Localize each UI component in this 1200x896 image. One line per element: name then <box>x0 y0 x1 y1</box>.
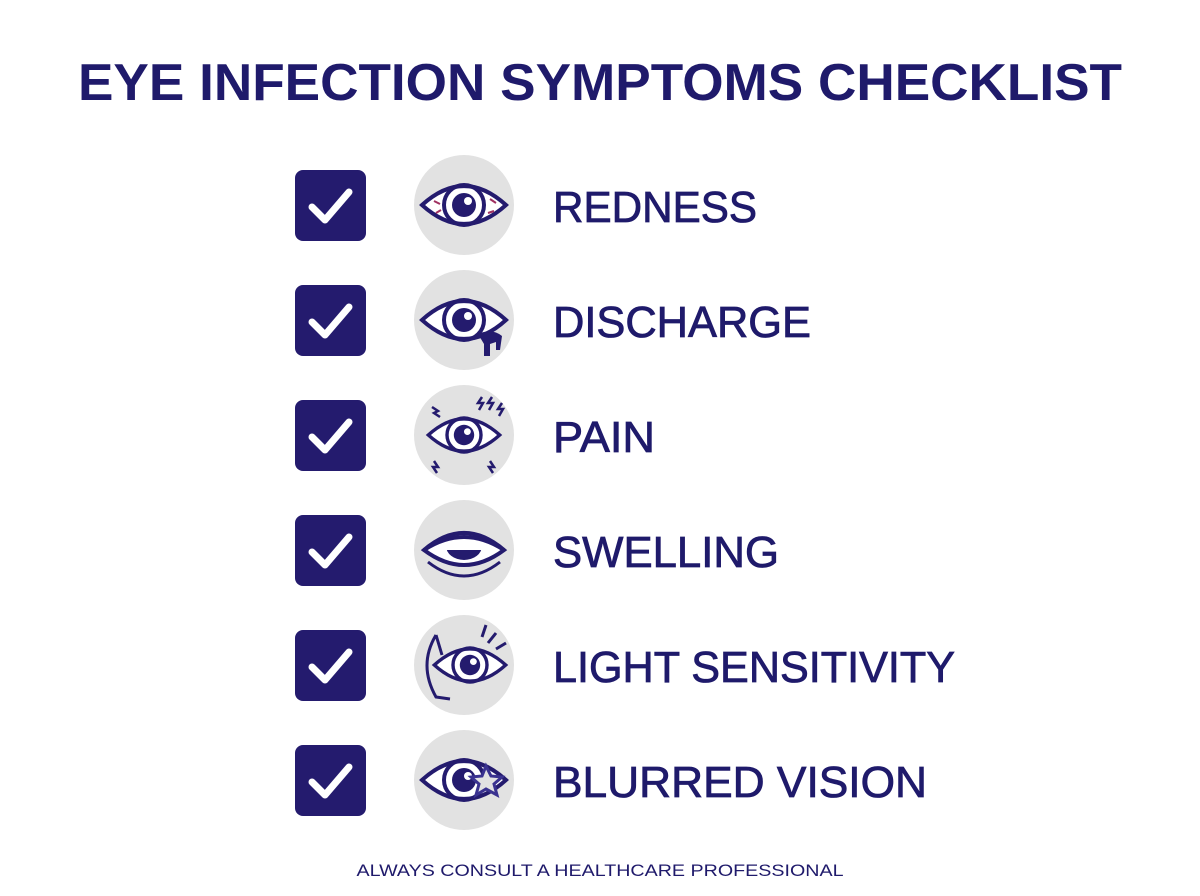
label: swelling: SWELLING <box>553 528 779 577</box>
icon: swollen eye <box>414 500 514 600</box>
label: blurred vision: BLURRED VISION <box>553 758 927 807</box>
label: light sensitivity: LIGHT SENSITIVITY <box>553 643 955 692</box>
footer note: ALWAYS CONSULT A HEALTHCARE PROFESSIONAL <box>356 861 844 880</box>
checkbox: blurred vision <box>295 745 366 816</box>
row: pain <box>295 385 655 485</box>
row: redness <box>295 155 757 255</box>
row: discharge <box>295 270 811 370</box>
row: light sensitivity <box>295 615 955 715</box>
label: redness: REDNESS <box>553 183 757 232</box>
checkbox: redness <box>295 170 366 241</box>
icon: blurred eye <box>414 730 514 830</box>
checkbox: light sensitivity <box>295 630 366 701</box>
icon: discharge eye <box>414 270 514 370</box>
checkbox: swelling <box>295 515 366 586</box>
title: EYE INFECTION SYMPTOMS CHECKLIST <box>78 54 1122 112</box>
label: pain: PAIN <box>553 413 655 462</box>
icon: pain eye <box>414 385 514 485</box>
icon: red eye <box>414 155 514 255</box>
label: discharge: DISCHARGE <box>553 298 811 347</box>
row: blurred vision <box>295 730 927 830</box>
row: swelling <box>295 500 779 600</box>
checkbox: discharge <box>295 285 366 356</box>
icon: light sensitive eye <box>414 615 514 715</box>
checkbox: pain <box>295 400 366 471</box>
